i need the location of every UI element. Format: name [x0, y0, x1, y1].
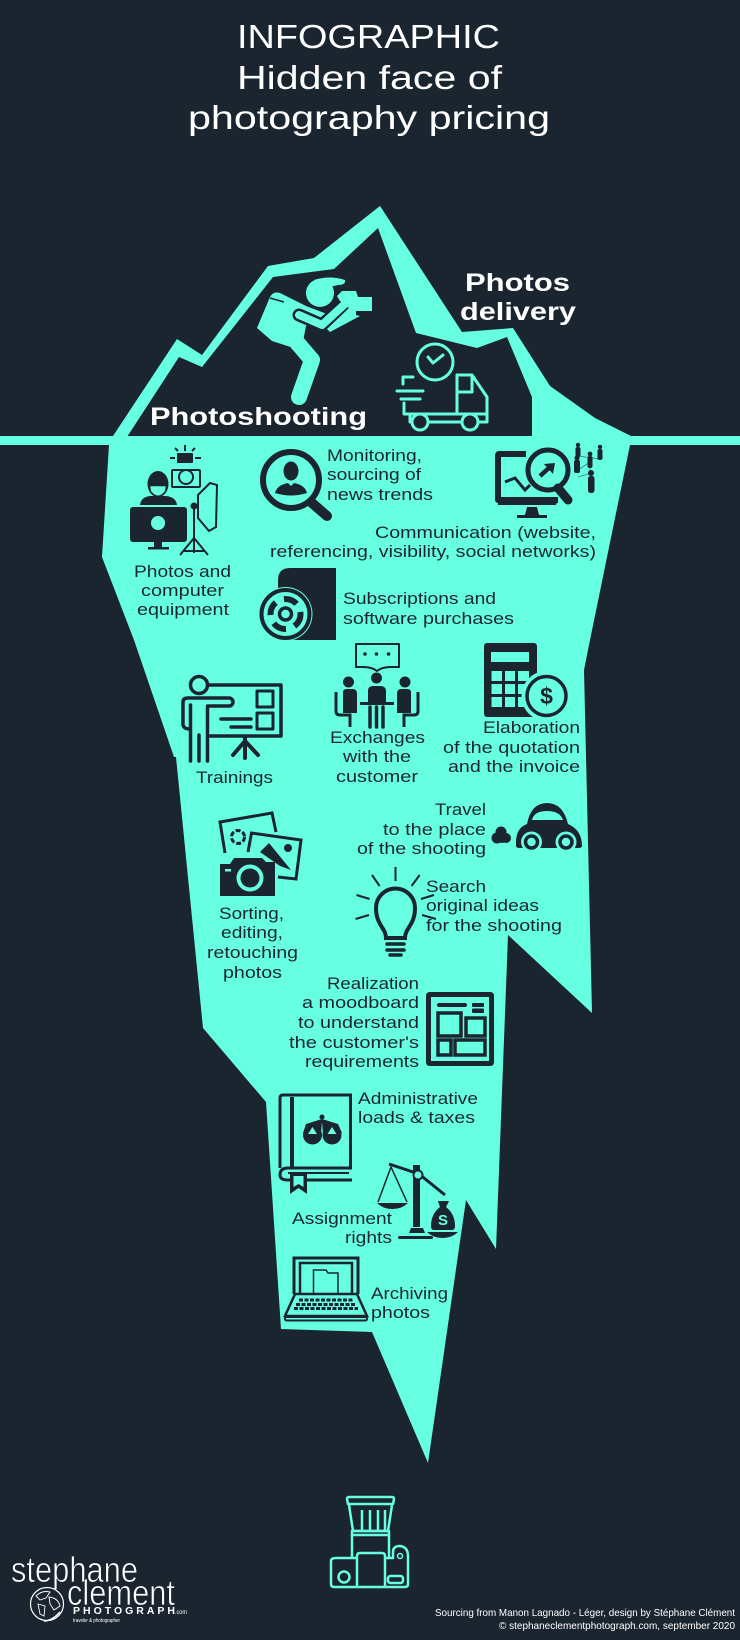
- text: Sorting: [207, 905, 298, 982]
- text: Administrative: Administrative: [358, 1090, 478, 1108]
- text: Realization: to understand: [298, 1014, 419, 1032]
- icon: calculator and coin: [484, 643, 572, 721]
- icon: calculator and coin: $: [540, 683, 553, 709]
- text: Elaboration: and the invoice: [448, 758, 580, 776]
- icon: customer meeting: [336, 644, 418, 727]
- icon: camera top view: [331, 1497, 408, 1587]
- icon: software box and disc: [258, 568, 336, 641]
- text: Communication: referencing, visibility, social networks): [270, 543, 596, 561]
- heading: Photos delivery: [460, 269, 576, 326]
- text: Elaboration: [443, 719, 580, 776]
- logo: Stephane Clement Photograph: [11, 1549, 187, 1624]
- text: Photos and computer equipment: equipment: [137, 601, 229, 619]
- text: Realization: [289, 975, 419, 1071]
- text: Communication: Communication (website,: [375, 524, 596, 542]
- icon: balance with money bag: [377, 1164, 458, 1239]
- text: Subscriptions: Subscriptions and: [343, 590, 496, 608]
- iceberg above water: [113, 206, 631, 437]
- text: Search: for the shooting: [426, 917, 562, 935]
- text: Realization: a moodboard: [302, 994, 419, 1012]
- icon: delivery truck: [397, 344, 487, 430]
- title: [188, 19, 550, 137]
- logo: Stephane Clement Photograph: .com: [175, 1610, 187, 1616]
- icon: law book: [280, 1095, 352, 1194]
- text: Monitoring: [327, 447, 433, 504]
- text: Travel: Travel: [435, 801, 486, 819]
- title: Hidden face of: [237, 60, 503, 97]
- iceberg below water: [0, 436, 740, 1463]
- text: Search: [426, 878, 562, 935]
- icon: moodboard: [428, 994, 492, 1064]
- text: Elaboration: Elaboration: [483, 719, 580, 737]
- logo: Stephane Clement Photograph: stephane: [11, 1549, 138, 1590]
- text: Assignment rights: Assignment: [292, 1210, 392, 1228]
- text: Archiving photos: photos: [371, 1304, 430, 1322]
- text: Exchanges: customer: [336, 768, 419, 786]
- text: Exchanges: with the: [342, 748, 411, 766]
- icon: photos and computer equipment: [130, 445, 217, 555]
- icon: photographer: [257, 278, 372, 397]
- text: Search: original ideas: [426, 897, 539, 915]
- text: Sorting: editing,: [221, 924, 283, 942]
- text: Monitoring: news trends: [327, 486, 433, 504]
- text: Realization: the customer's: [289, 1034, 419, 1052]
- text: Assignment rights: [292, 1210, 392, 1247]
- icon: light bulb: [356, 867, 436, 955]
- icon: car with smoke: [492, 803, 582, 852]
- text: Photos and computer equipment: computer: [141, 582, 225, 600]
- text: Travel: [357, 801, 486, 858]
- title: photography pricing: [188, 100, 550, 137]
- text: Travel: to the place: [383, 821, 486, 839]
- logo: Stephane Clement Photograph: PHOTOGRAPH: [73, 1605, 175, 1617]
- text: Archiving photos: Archiving: [371, 1285, 448, 1303]
- text: Administrative: [358, 1090, 478, 1127]
- text: Photos and computer equipment: Photos and: [134, 563, 231, 581]
- logo: Stephane Clement Photograph: traveler & photographer: [73, 1618, 120, 1624]
- text: Search: Search: [426, 878, 486, 896]
- icon: photos and camera: [220, 813, 301, 896]
- text: Communication: [270, 524, 596, 561]
- text: Sorting: photos: [223, 964, 282, 982]
- text: Subscriptions: software purchases: [343, 610, 514, 628]
- text: Travel: of the shooting: [357, 840, 486, 858]
- text: Archiving photos: [371, 1285, 448, 1322]
- icon: laptop with folder: [285, 1258, 367, 1320]
- text: Realization: requirements: [305, 1053, 419, 1071]
- text: Trainings: Trainings: [196, 769, 273, 787]
- text: Exchanges: [330, 729, 425, 786]
- text: Subscriptions: [343, 590, 514, 628]
- heading: Photos delivery: Photos: [465, 269, 570, 297]
- icon: balance with money bag: S: [438, 1212, 448, 1229]
- footer credits: [435, 1607, 735, 1632]
- text: Assignment rights: rights: [345, 1229, 392, 1247]
- text: Administrative: loads & taxes: [358, 1109, 475, 1127]
- logo: Stephane Clement Photograph: clement: [67, 1572, 175, 1613]
- title: INFOGRAPHIC: [237, 19, 500, 56]
- text: Sorting: retouching: [207, 944, 298, 962]
- footer credits: © stephaneclementphotograph.com, september 2020: [499, 1620, 735, 1632]
- icon: communication monitor: [498, 443, 602, 518]
- heading: Photos delivery: delivery: [460, 298, 576, 326]
- text: Photos and computer equipment: [134, 563, 231, 619]
- text: Exchanges: Exchanges: [330, 729, 425, 747]
- text: Monitoring: Monitoring,: [327, 447, 422, 465]
- text: Realization: Realization: [327, 975, 419, 993]
- text: Elaboration: of the quotation: [443, 739, 580, 757]
- heading: Photoshooting: Photoshooting: [150, 403, 367, 431]
- text: Monitoring: sourcing of: [327, 466, 421, 484]
- icon: magnifier with person: [263, 452, 327, 516]
- icon: trainings: [183, 676, 281, 761]
- text: Sorting: Sorting,: [219, 905, 284, 923]
